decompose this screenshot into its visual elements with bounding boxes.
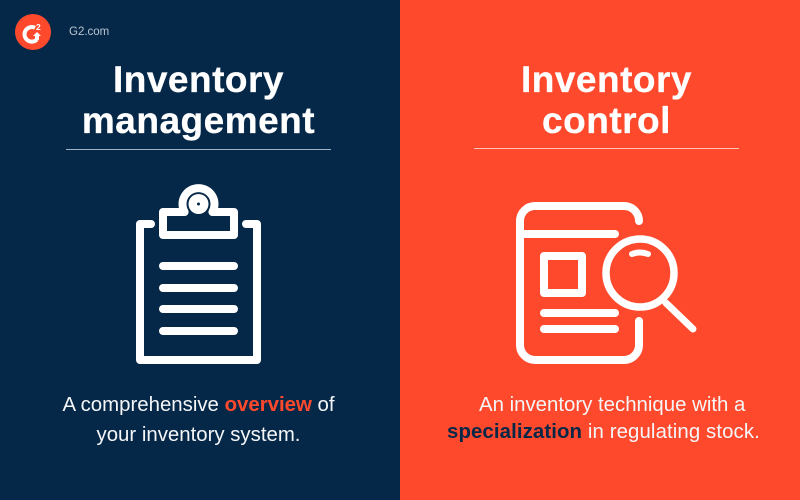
description: your inventory system. bbox=[96, 424, 300, 446]
description: specialization in regulating stock. bbox=[447, 420, 760, 442]
divider bbox=[66, 149, 331, 150]
heading: Inventory bbox=[521, 59, 692, 100]
divider bbox=[474, 148, 739, 149]
heading: control bbox=[542, 100, 671, 141]
icon: document with magnifier bbox=[516, 202, 696, 364]
description: A comprehensive overview of bbox=[62, 394, 335, 416]
description bbox=[62, 394, 335, 446]
logo: G2 bbox=[15, 14, 51, 50]
icon: clipboard bbox=[136, 184, 261, 364]
heading bbox=[82, 59, 315, 141]
panel: inventory management bbox=[0, 0, 400, 500]
source label: G2.com bbox=[69, 26, 109, 38]
heading bbox=[521, 59, 692, 141]
logo: G2: 2 bbox=[36, 22, 41, 32]
description: An inventory technique with a bbox=[479, 394, 745, 416]
description bbox=[447, 394, 760, 442]
panel: inventory control bbox=[400, 0, 800, 500]
heading: management bbox=[82, 100, 315, 141]
heading: Inventory bbox=[113, 59, 284, 100]
